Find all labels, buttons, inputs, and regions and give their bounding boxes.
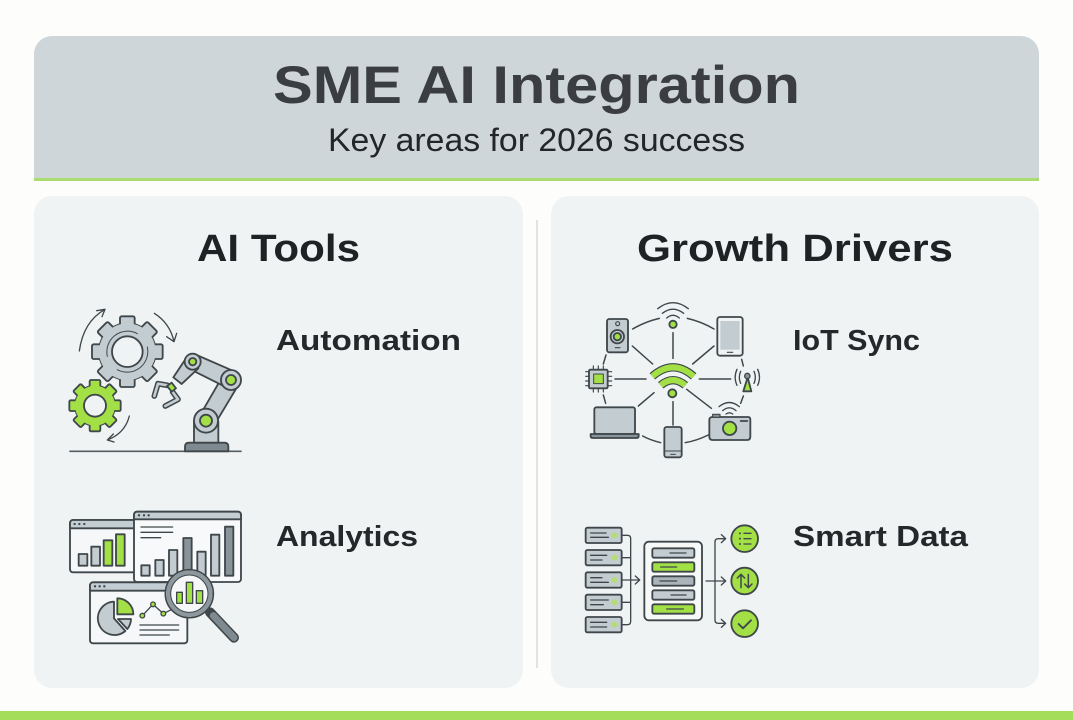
output: sync arrows (731, 568, 758, 594)
robot arm (185, 443, 228, 451)
ground line (69, 449, 242, 454)
output: list (731, 525, 758, 552)
icon: IoT network (586, 303, 759, 457)
rotation arrows (79, 309, 177, 442)
tablet (717, 317, 743, 356)
label: IoT Sync: IoT Sync (793, 325, 920, 357)
panel: Growth Drivers (551, 196, 1039, 688)
central data stack (644, 542, 702, 620)
title: SME AI Integration (273, 56, 800, 115)
central wifi symbol (652, 367, 694, 385)
icon: gears and robot arm (69, 309, 242, 451)
panel: AI Tools (34, 196, 523, 688)
heading: Growth Drivers: Growth Drivers (637, 228, 953, 270)
subtitle: Key areas for 2026 success (328, 122, 745, 158)
label: Smart Data: Smart Data (793, 521, 969, 553)
input connector (622, 535, 640, 625)
output connector (706, 535, 726, 627)
magnifier (165, 570, 234, 638)
heading: AI Tools: AI Tools (197, 228, 360, 270)
gripper (154, 383, 178, 406)
window: right bar chart (134, 512, 241, 582)
output: check (731, 610, 758, 637)
bottom green bar (0, 711, 1073, 720)
icon: smart data flow (586, 525, 758, 637)
label: Automation: Automation (276, 325, 461, 357)
large gear (92, 316, 163, 387)
window: left bar chart (70, 520, 137, 572)
camera (709, 402, 750, 440)
phone (664, 427, 682, 457)
chip (586, 366, 612, 392)
laptop (591, 407, 639, 438)
divider (536, 220, 538, 668)
window: front pie chart (90, 582, 187, 643)
wifi node top (658, 303, 688, 328)
speaker (607, 319, 628, 352)
antenna (735, 369, 759, 391)
source servers (586, 528, 622, 632)
icon: analytics dashboards with magnifier (70, 512, 241, 643)
connection lines (603, 318, 743, 443)
small green gear (69, 380, 121, 431)
header banner (34, 36, 1039, 181)
label: Analytics: Analytics (276, 521, 418, 553)
